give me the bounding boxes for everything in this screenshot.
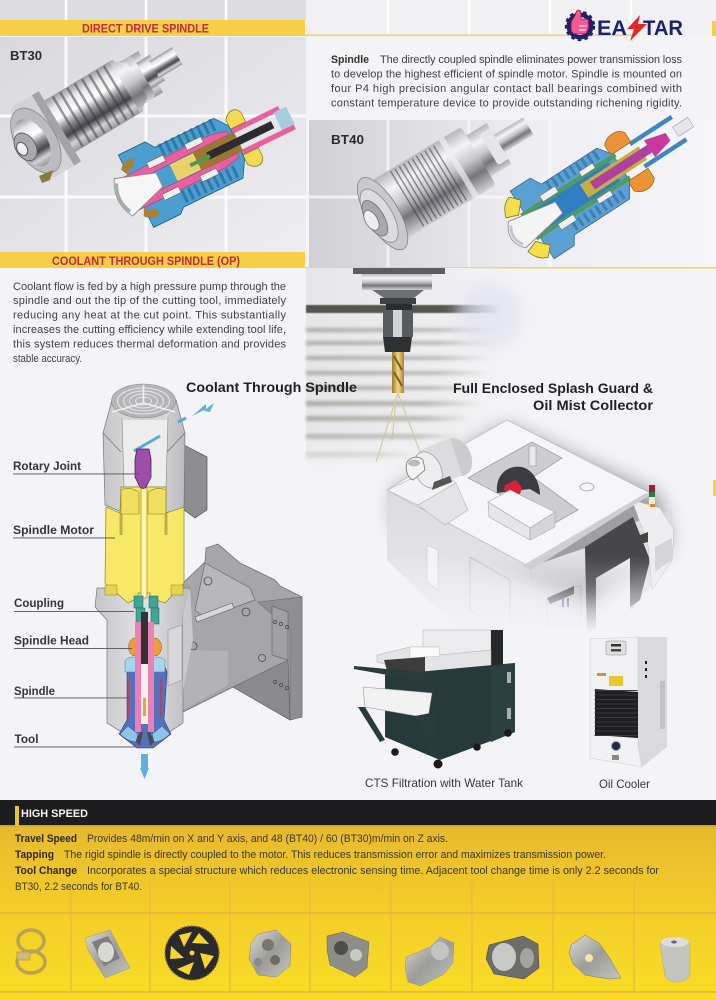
- spindle section: [119, 612, 171, 748]
- photo backdrop stripes: [306, 268, 521, 478]
- text block: coolant description: Coolant flow is fed by a high pressure pump through the: [13, 281, 286, 293]
- dial: [580, 483, 594, 491]
- red motor: [504, 480, 522, 496]
- text block: tool change: [15, 865, 659, 893]
- illustration: enclosed machine with mist collector: [387, 420, 674, 650]
- text block: tool change: Incorporates a special structure which reduces electronic sensing time. Adjacent tool change time is only 2.2 seconds for: [87, 865, 659, 877]
- header band: HIGH SPEED: [21, 808, 88, 820]
- part: casing 2: [486, 936, 539, 979]
- coupling: [134, 596, 159, 624]
- part: cylinder head 1: [249, 930, 291, 977]
- text block: tapping: Tapping: [15, 849, 54, 861]
- outlet: [612, 742, 620, 750]
- callout: spindle: [14, 684, 130, 698]
- illustration: oil cooler: [590, 637, 667, 767]
- chute: [354, 666, 430, 680]
- text block: coolant description: increases the cutting efficiency while extending tool life,: [13, 324, 286, 336]
- lower housing: [95, 588, 193, 737]
- part: brass frame: [17, 930, 45, 973]
- diagram: coolant spindle cross-section: [95, 384, 302, 779]
- chip tray: [363, 687, 432, 718]
- icon: gear with thumb: [566, 10, 594, 40]
- callout: rotary joint: Rotary Joint: [13, 459, 81, 473]
- spindle cutaway: BT30 colour section: [100, 80, 308, 236]
- callout: tool: Tool: [14, 732, 38, 746]
- panel: BT40 background: [309, 120, 716, 268]
- text block: travel speed: Provides 48m/min on X and Y axis, and 48 (BT40) / 60 (BT30)m/min on Z axis.: [87, 833, 448, 845]
- soft shadow: [392, 424, 672, 600]
- coolant inlet pipe: [134, 418, 186, 451]
- callout: spindle head: Spindle Head: [14, 634, 89, 648]
- part: casing 1: [405, 937, 454, 986]
- callout: spindle motor: Spindle Motor: [13, 523, 94, 537]
- rotary joint: [135, 449, 151, 488]
- text block: coolant description: stable accuracy.: [13, 353, 82, 365]
- roof plate: [387, 420, 650, 567]
- caption: oil cooler: Oil Cooler: [599, 777, 650, 791]
- text block: spindle description: [331, 54, 682, 110]
- machined parts row: [17, 926, 690, 986]
- spindle head bearings: [128, 638, 162, 656]
- callout: tool: [14, 732, 136, 747]
- lower walls: [387, 493, 674, 628]
- arrow: coolant outlet: [140, 754, 149, 779]
- text block: coolant description: reducing any heat at the cut point. This substantially: [13, 310, 286, 322]
- fan grille: [112, 384, 176, 418]
- grinding wheel: [497, 467, 540, 495]
- logo: Eastar: EA: [597, 17, 627, 40]
- heading: splash guard: [453, 381, 654, 413]
- text block: coolant description: this system reduces thermal deformation and provides: [13, 338, 286, 350]
- edge tick: [713, 480, 716, 496]
- illustration: CTS filtration with water tank: [354, 630, 515, 768]
- heading: splash guard: Oil Mist Collector: [533, 398, 654, 413]
- terminal strip: [529, 446, 536, 466]
- part: aluminium cylinder: [660, 937, 690, 982]
- collector box: [488, 490, 555, 540]
- machine column casting: [183, 544, 302, 720]
- top strip with grid: [0, 0, 716, 35]
- callout: spindle head: [14, 634, 132, 649]
- caption: CTS filtration: CTS Filtration with Water Tank: [365, 776, 524, 790]
- cooling grille: [595, 689, 638, 738]
- part: casing 3: [569, 935, 621, 979]
- label: BT40: BT40: [331, 132, 364, 147]
- small connector on BT30: [39, 170, 53, 183]
- arrow: coolant inlet: [192, 403, 214, 416]
- drill bit: [392, 352, 404, 393]
- heading bar: coolant through spindle: COOLANT THROUGH SPINDLE (OP): [52, 256, 240, 268]
- text block: travel speed: Travel Speed: [15, 833, 77, 845]
- callout: coupling: [14, 596, 134, 612]
- part: cylinder head 2: [327, 932, 369, 977]
- icon: lightning bolt: [627, 15, 647, 41]
- text block: coolant description: [13, 281, 286, 365]
- text block: spindle description: Spindle: [331, 54, 369, 66]
- part: black sprocket: [165, 926, 219, 980]
- roof recess: [468, 442, 578, 523]
- label: BT30: BT30: [10, 48, 42, 63]
- left panels: [387, 468, 456, 505]
- text block: coolant description: spindle and out the tip of the cutting tool, immediately: [13, 295, 286, 307]
- heading bar: direct drive spindle: DIRECT DRIVE SPINDLE: [82, 24, 209, 36]
- yellow background with grid: [0, 826, 716, 1000]
- warning label: [609, 676, 623, 686]
- motor cover: [103, 400, 185, 513]
- heading: splash guard: Full Enclosed Splash Guard &: [453, 381, 653, 396]
- text block: spindle description: four P4 high precision angular contact ball bearings combined with: [331, 83, 682, 95]
- part: milled block: [85, 930, 130, 978]
- callout labels: [13, 459, 140, 747]
- spindle photo: BT30 silver: [0, 21, 198, 187]
- spindle photo: BT40 silver: [345, 91, 549, 259]
- callout: rotary joint: [13, 459, 140, 474]
- text block: tool change: Tool Change: [15, 865, 77, 877]
- electric box: [184, 445, 207, 518]
- signal tower: [649, 485, 655, 507]
- text block: spindle description: The directly coupled spindle eliminates power transmission loss: [380, 54, 682, 66]
- logo: Eastar: TAR: [643, 17, 683, 40]
- blue tint: [456, 281, 524, 349]
- spindle nose parts: [353, 268, 445, 352]
- spindle cutaway: BT40 colour section: [489, 88, 713, 272]
- coolant spray: [376, 393, 420, 462]
- wheels: [391, 729, 512, 768]
- callout: spindle: Spindle: [14, 684, 55, 698]
- heading bar: direct drive spindle: [0, 20, 716, 36]
- heading bar: coolant through spindle: [0, 252, 716, 269]
- text block: tool change: BT30, 2.2 seconds for BT40.: [15, 881, 142, 893]
- callout: coupling: Coupling: [14, 596, 64, 610]
- header band: [0, 800, 716, 826]
- mist collector blower: [406, 433, 478, 493]
- logo: Eastar: [566, 10, 683, 41]
- photo: cutting tool with coolant spray: [306, 268, 524, 478]
- text block: spindle description: constant temperature device to provide outstanding richening rigidity.: [331, 98, 682, 110]
- heading: coolant through spindle: Coolant Through Spindle: [186, 380, 358, 395]
- panel: high speed: [0, 800, 716, 1000]
- panel: BT30 background: [0, 37, 306, 252]
- tank top: [423, 630, 491, 660]
- text block: spindle description: to develop the highest efficient of spindle motor. Spindle is mounted on: [331, 68, 682, 80]
- text block: tapping: The rigid spindle is directly coupled to the motor. This reduces transmission error and maximizes transmission power.: [64, 849, 606, 861]
- spindle motor yellow section: [105, 487, 184, 603]
- tank body: [385, 663, 515, 760]
